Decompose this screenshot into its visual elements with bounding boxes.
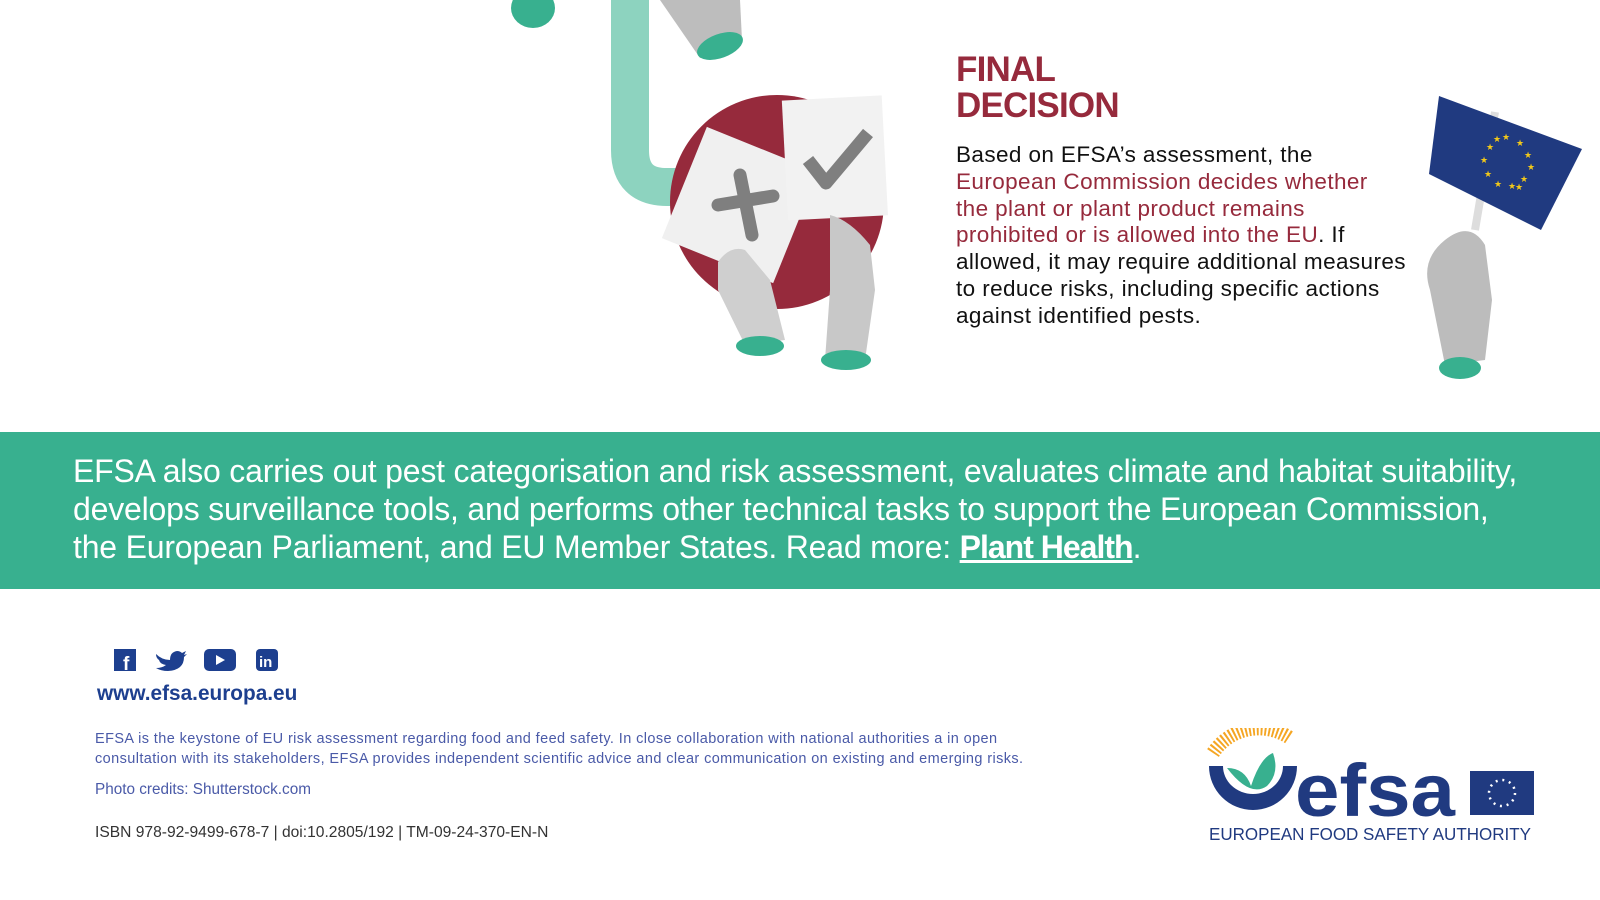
top-left arm end bbox=[511, 0, 555, 28]
logo: efsa: efsa bbox=[1295, 749, 1456, 832]
disclaimer text: EFSA is the keystone of EU risk assessment regarding food and feed safety. In close collaboration with national authorities a in open bbox=[95, 731, 997, 747]
banner text: the European Parliament, and EU Member States. Read more: Plant Health. bbox=[73, 529, 1141, 565]
banner: EFSA also carries out bbox=[0, 432, 1600, 589]
teal pipe bbox=[630, 0, 690, 187]
icon: hand with EU flag: ★ bbox=[1484, 169, 1492, 179]
icon: hand with EU flag: ★ bbox=[1520, 174, 1528, 184]
icon: hand with EU flag: ★ bbox=[1494, 179, 1502, 189]
text block: decision description: to reduce risks, including specific actions bbox=[956, 276, 1380, 301]
text block: decision description: European Commission decides whether bbox=[956, 169, 1368, 194]
text block: decision description: prohibited or is allowed into the EU. If bbox=[956, 222, 1345, 247]
heading: final decision: FINAL bbox=[956, 50, 1055, 89]
heading: final decision: DECISION bbox=[956, 86, 1119, 125]
disclaimer text bbox=[95, 731, 1024, 766]
website url: www.efsa.europa.eu bbox=[97, 682, 297, 705]
illustration: decision cards bbox=[511, 0, 888, 370]
text block: decision description: allowed, it may require additional measures bbox=[956, 249, 1406, 274]
card with cross bbox=[662, 127, 818, 283]
icon: hand with EU flag: ★ bbox=[1480, 155, 1488, 165]
red circle bbox=[670, 95, 884, 309]
text block: decision description: against identified pests. bbox=[956, 303, 1201, 328]
icon: hand with EU flag: ★ bbox=[1486, 142, 1494, 152]
text block: decision description: Based on EFSA’s assessment, the bbox=[956, 142, 1313, 167]
icon: hand with EU flag: ★ bbox=[1508, 181, 1516, 191]
text block: decision description bbox=[956, 142, 1406, 328]
icon: hand with EU flag: ★ bbox=[1493, 134, 1501, 144]
social icons bbox=[114, 649, 278, 672]
hands bbox=[718, 249, 785, 345]
banner text bbox=[73, 453, 1517, 565]
disclaimer text: consultation with its stakeholders, EFSA provides independent scientific advice and clear communication on existing and emerging risks. bbox=[95, 750, 1024, 766]
card with tick bbox=[782, 95, 888, 220]
top arm bbox=[660, 0, 742, 58]
isbn: ISBN 978-92-9499-678-7 | doi:10.2805/192 | TM-09-24-370-EN-N bbox=[95, 824, 548, 841]
icon: hand with EU flag bbox=[1427, 96, 1582, 379]
icon: hand with EU flag: ★ bbox=[1527, 162, 1535, 172]
photo credits: Photo credits: Shutterstock.com bbox=[95, 781, 311, 798]
banner text: develops surveillance tools, and performs other technical tasks to support the European Commission, bbox=[73, 491, 1489, 527]
logo: efsa: EUROPEAN FOOD SAFETY AUTHORITY bbox=[1209, 824, 1531, 844]
icon: hand with EU flag: ★ bbox=[1516, 138, 1524, 148]
text block: decision description: the plant or plant product remains bbox=[956, 196, 1305, 221]
banner text: EFSA also carries out pest categorisation and risk assessment, evaluates climate and habitat suitability, bbox=[73, 453, 1517, 489]
icon: hand with EU flag: ★ bbox=[1502, 132, 1510, 142]
logo: efsa bbox=[1207, 728, 1534, 844]
social icons: in bbox=[259, 654, 272, 671]
icon: hand with EU flag: ★ bbox=[1524, 150, 1532, 160]
icon: hand with EU flag: ★ bbox=[1515, 182, 1523, 192]
heading: final decision bbox=[956, 50, 1119, 125]
